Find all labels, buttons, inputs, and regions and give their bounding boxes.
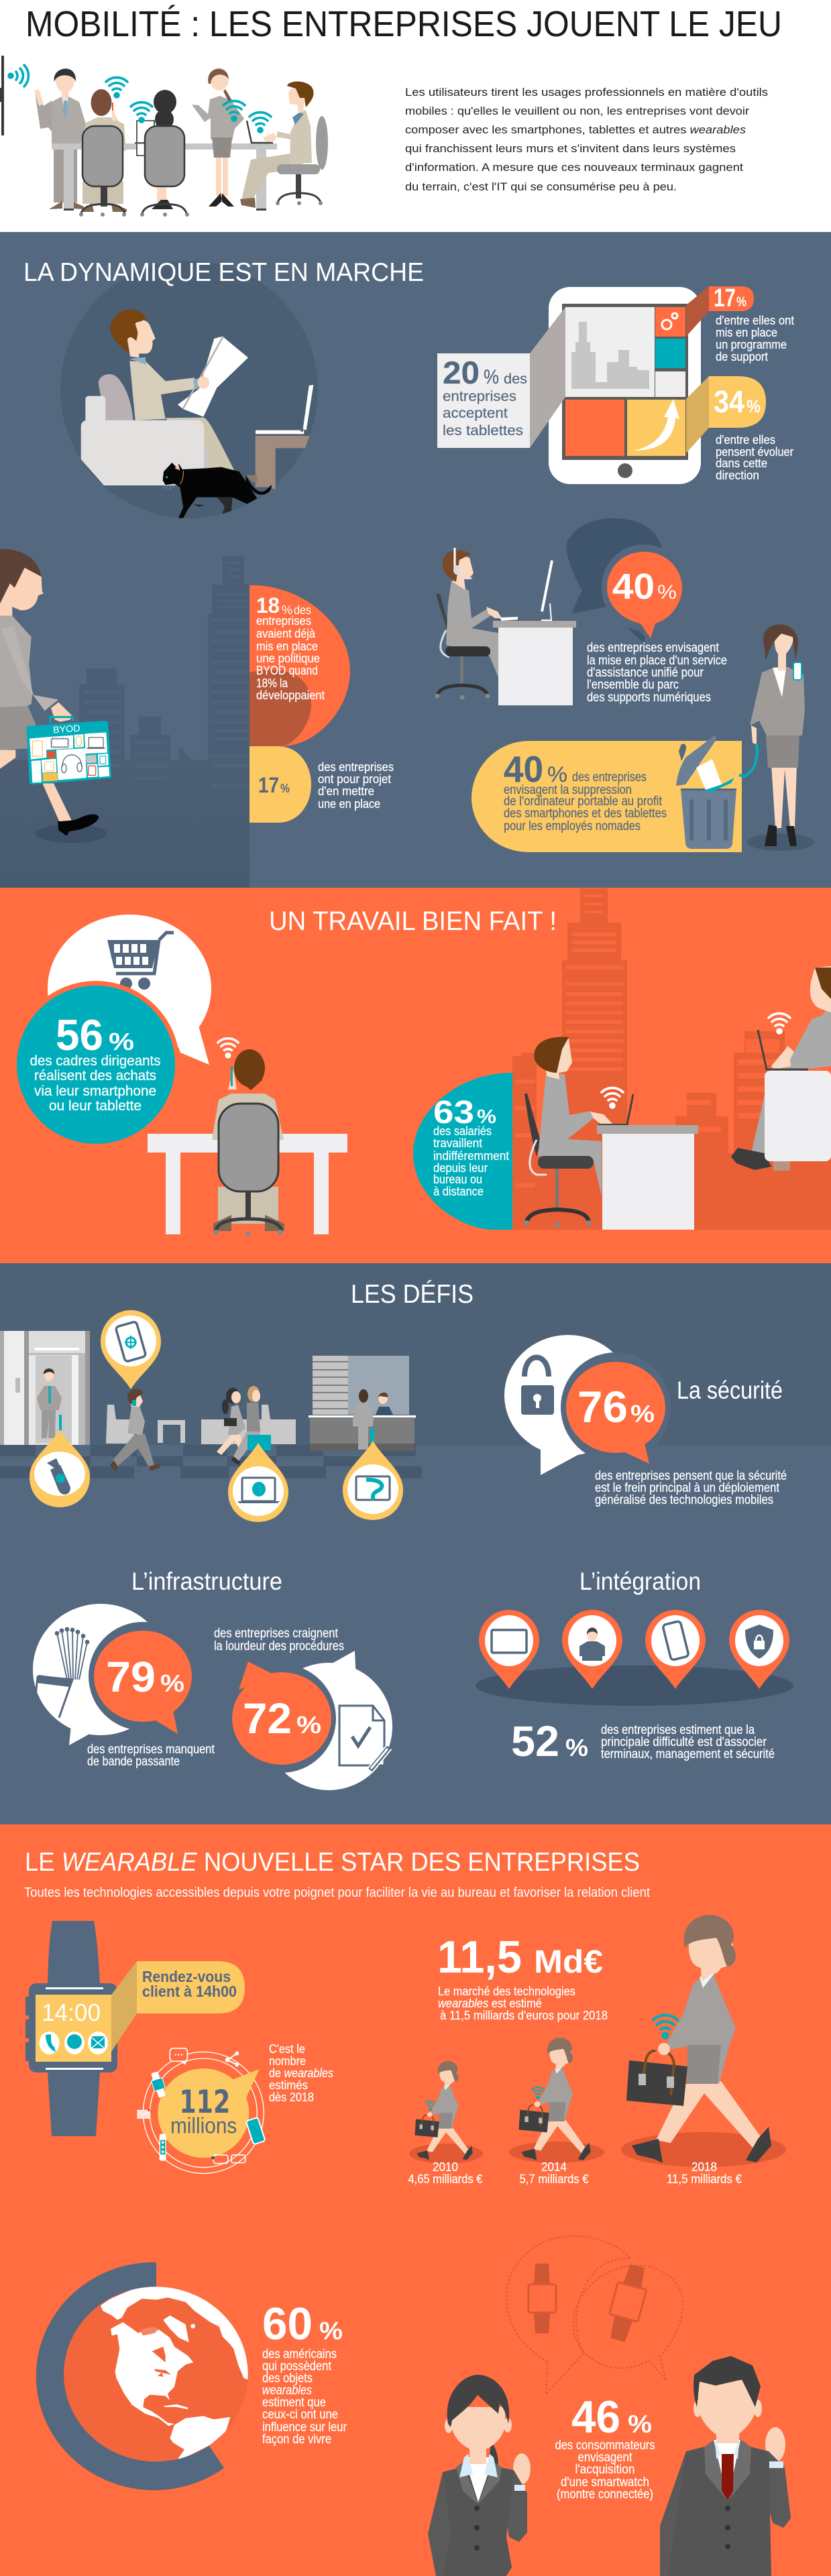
stat: 40% laptop removal with trash: 40	[504, 748, 543, 790]
illustration: man at laptop	[524, 1037, 698, 1230]
callout: 17% support program: d'entre elles ont	[716, 314, 794, 327]
stat: 46% smartwatch: (montre connectée)	[557, 2487, 653, 2502]
stat: 112 millions wearables: estimés	[269, 2079, 308, 2092]
callout: 17% support program: %	[736, 294, 746, 310]
chart: market growth walkers: 5,7 milliards €	[519, 2172, 589, 2186]
pin: infected usb key	[30, 1429, 90, 1507]
pin: laptop bug	[228, 1443, 288, 1522]
heading: LA DYNAMIQUE EST EN MARCHE	[23, 258, 424, 287]
callout: 17% support program	[686, 284, 794, 363]
callout: 34% plan to evolve: pensent évoluer	[716, 445, 793, 459]
pin: smartphone	[645, 1610, 706, 1689]
stat bubble: 40% unified support service: 40	[612, 567, 655, 607]
stat bubble: 40% unified support service: des entreprises envisagent	[587, 641, 720, 655]
stat bubble: 40% unified support service	[587, 544, 727, 705]
illustration: globe	[36, 2262, 252, 2490]
stat circle: 56%: réalisent des achats	[34, 1068, 156, 1084]
callout: 20% accept tablets: %	[484, 366, 499, 388]
stat: 72% procedures: la lourdeur des procédures	[214, 1639, 344, 1653]
chart: market growth walkers: 2014	[541, 2160, 567, 2174]
stat: 76% security: %	[630, 1400, 655, 1427]
stat: 52%: principale difficulté est d'associer	[601, 1735, 767, 1749]
stat: 17% projects: %	[280, 782, 290, 795]
illustration: man reading on a sofa with cat	[60, 261, 318, 518]
stat: 60% americans: estiment que	[262, 2396, 326, 2410]
stat: 79% bandwidth: 79	[106, 1653, 156, 1701]
stat: 63%: travaillent	[433, 1136, 482, 1150]
stat: 17% projects: 17	[258, 773, 279, 797]
stat: 40% laptop removal with trash: de l'ordinateur portable au profit	[504, 795, 663, 809]
stat: 11,5 Md€: à 11,5 milliards d'euros pour 2018	[440, 2009, 608, 2022]
illustration: smartwatch: 14:00	[42, 1999, 101, 2026]
stat circle: 56%: des cadres dirigeants	[30, 1053, 161, 1069]
stat: 60% americans: façon de vivre	[262, 2433, 331, 2447]
stat: 60% americans: wearables	[262, 2384, 312, 2398]
stat: 60% americans: des objets	[262, 2372, 313, 2386]
chart: market growth walkers	[408, 1915, 786, 2186]
callout: 34% plan to evolve: d'entre elles	[716, 433, 775, 447]
stat circle: 56%: 56	[56, 1010, 103, 1059]
stat bubble: 40% unified support service: l'ensemble du parc	[587, 678, 679, 692]
stat: 112 millions wearables: dès 2018	[269, 2091, 314, 2104]
stat: 79% bandwidth	[33, 1604, 215, 1769]
stat: 60% americans: influence sur leur	[262, 2420, 347, 2435]
illustration: dotted watch bubbles	[506, 2236, 683, 2394]
stat: 40% laptop removal with trash: pour les employés nomades	[504, 819, 641, 833]
stat: 46% smartwatch: %	[628, 2410, 652, 2438]
intro text block	[405, 86, 768, 193]
stat: 60% americans: %	[319, 2317, 343, 2345]
stat: 76% security: généralisé des technologies mobiles	[595, 1493, 773, 1507]
illustration: support agent at desk	[435, 518, 663, 705]
chart: market growth walkers: 2018	[691, 2160, 717, 2174]
stat circle: 56%: %	[109, 1028, 134, 1055]
chart: market growth walkers: 4,65 milliards €	[408, 2172, 483, 2186]
stat: 46% smartwatch: 46	[571, 2392, 620, 2443]
callout: 20% accept tablets: les tablettes	[443, 423, 523, 438]
stat: 76% security: 76	[577, 1382, 628, 1431]
stat: 18% BYOD policy: avaient déjà	[256, 627, 316, 640]
stat: 112 millions wearables	[137, 2042, 333, 2174]
stat: 63%: des salariés	[433, 1124, 492, 1138]
panel: un travail bien fait	[12, 888, 831, 1236]
stat: 40% laptop removal with trash: envisagent la suppression	[504, 783, 632, 797]
stat: 60% americans: ceux-ci ont une	[262, 2408, 338, 2422]
bubble: cart	[48, 915, 211, 1065]
stat: 52%: terminaux, management et sécurité	[601, 1747, 775, 1761]
stat: 79% bandwidth: %	[160, 1670, 184, 1697]
stat: 11,5 Md€	[437, 1932, 608, 2022]
panel: la dynamique est en marche	[0, 258, 814, 888]
stat: 112 millions wearables: de wearables	[269, 2066, 333, 2080]
stat: 18% BYOD policy: BYOD quand	[256, 664, 318, 677]
illustration: tablet with stats	[437, 284, 794, 484]
stat: 46% smartwatch: envisagent	[578, 2451, 632, 2465]
stat: 18% BYOD policy: une politique	[256, 652, 320, 665]
intro text block: du terrain, c'est l'IT qui se consumérise peu à peu.	[405, 180, 677, 193]
subheading: Toutes les technologies accessibles depuis votre poignet pour faciliter la vie au bureau et favoriser la relation client	[24, 1885, 650, 1900]
illustration: smartwatch	[25, 1921, 245, 2136]
stat: 63%: 63	[433, 1095, 474, 1130]
stat: 60% americans: des américains	[262, 2347, 337, 2361]
illustration: man from behind at desk	[148, 1049, 347, 1236]
callout: appointment	[111, 1961, 245, 2052]
callout: 17% support program: mis en place	[716, 326, 777, 339]
stat: 11,5 Md€: Md€	[534, 1944, 603, 1980]
stat: 63%	[413, 1073, 512, 1230]
stat: 17% projects: ont pour projet	[318, 772, 391, 786]
stat: 52%: %	[565, 1734, 588, 1761]
callout: 34% plan to evolve: %	[746, 396, 761, 416]
stat: 60% americans	[262, 2298, 347, 2447]
background skyline	[512, 888, 831, 1230]
illustration: meeting scene	[0, 56, 328, 217]
callout: 20% accept tablets: 20	[443, 355, 480, 390]
panel: le wearable	[24, 1848, 791, 2576]
stat: 18% BYOD policy: mis en place	[256, 640, 318, 653]
stat: 79% bandwidth: des entreprises manquent	[87, 1743, 215, 1757]
pin: shield	[729, 1610, 789, 1689]
stat: 52%: des entreprises estiment que la	[601, 1723, 755, 1737]
stat circle: 56%	[12, 981, 180, 1149]
callout: 20% accept tablets	[437, 307, 565, 448]
stat: 17% projects: des entreprises	[318, 760, 394, 774]
illustration: woman with phone	[747, 624, 814, 851]
stat: 17% projects	[250, 746, 394, 823]
stat: 18% BYOD policy: 18	[256, 593, 280, 618]
stat: 112 millions wearables: 112	[179, 2084, 230, 2121]
stat: 112 millions wearables: C'est le	[269, 2042, 305, 2056]
illustration: businessman	[660, 2356, 791, 2576]
stat: 52%	[511, 1717, 775, 1765]
stat: 40% laptop removal with trash: des entreprises	[572, 770, 647, 784]
stat: 11,5 Md€: Le marché des technologies	[438, 1985, 575, 1998]
illustration: BYOD woman and skyline	[0, 549, 250, 888]
stat: 18% BYOD policy: entreprises	[256, 614, 311, 628]
stat: 40% laptop removal with trash: des smartphones et des tablettes	[504, 807, 667, 821]
callout: 20% accept tablets: acceptent	[443, 406, 508, 421]
pin: person	[562, 1610, 622, 1689]
stat: 18% BYOD policy: des	[294, 603, 311, 617]
callout: 17% support program: de support	[716, 350, 768, 363]
icon: wifi	[218, 1039, 238, 1057]
pin: tablet	[479, 1610, 539, 1689]
stat: 76% security: des entreprises pensent que la sécurité	[595, 1469, 787, 1483]
stat: 17% projects: une en place	[318, 797, 380, 811]
stat: 40% laptop removal with trash	[472, 736, 757, 852]
intro text block: qui franchissent leurs murs et s'invitent dans leurs systèmes	[405, 142, 736, 155]
sub-heading: infrastructure: L’infrastructure	[131, 1568, 282, 1595]
stat: 60% americans: qui possèdent	[262, 2359, 332, 2374]
pin: tablet worm	[343, 1441, 403, 1520]
stat: 40% laptop removal with trash: %	[547, 762, 567, 786]
stat bubble: 40% unified support service: %	[657, 581, 677, 603]
callout: appointment: Rendez-vous	[142, 1968, 231, 1985]
callout: 34% plan to evolve: direction	[716, 469, 759, 482]
stat: 46% smartwatch: des consommateurs	[555, 2439, 655, 2453]
stat: 63%: bureau ou	[433, 1173, 482, 1186]
stat circle: 56%: ou leur tablette	[49, 1098, 142, 1114]
stat: 63%: depuis leur	[433, 1161, 488, 1175]
pin: infected phone	[101, 1310, 161, 1389]
stat: 76% security	[504, 1335, 787, 1507]
callout: 34% plan to evolve	[686, 376, 793, 482]
stat: 46% smartwatch: l'acquisition	[575, 2463, 634, 2477]
heading: LES DÉFIS	[351, 1280, 474, 1309]
stat circle: 56%: via leur smartphone	[34, 1084, 156, 1099]
stat: 46% smartwatch: d'une smartwatch	[561, 2475, 649, 2490]
stat: 72% procedures: %	[296, 1711, 321, 1739]
stat: 18% BYOD policy	[250, 585, 350, 746]
stat: 60% americans: 60	[262, 2298, 313, 2349]
stat: 72% procedures	[214, 1627, 392, 1790]
stat: 18% BYOD policy: 18% la	[256, 677, 288, 690]
chart: market growth walkers: 11,5 milliards €	[667, 2172, 742, 2186]
stat: 72% procedures: des entreprises craignent	[214, 1627, 339, 1641]
callout: 20% accept tablets: des	[504, 371, 527, 387]
stat: 112 millions wearables: nombre	[269, 2054, 306, 2068]
stat: 63%: indifféremment	[433, 1149, 509, 1163]
callout: 20% accept tablets: entreprises	[443, 389, 516, 404]
illustration: second worker at desk	[731, 966, 831, 1171]
illustration: BYOD woman and skyline: BYOD	[52, 723, 80, 735]
stat: 18% BYOD policy: %	[282, 603, 292, 617]
callout: 17% support program: 17	[714, 284, 736, 312]
panel: les défis	[0, 1280, 793, 1790]
stat: 18% BYOD policy: développaient	[256, 689, 325, 702]
stat: 11,5 Md€: wearables est estimé	[438, 1997, 542, 2010]
stat: 112 millions wearables: millions	[170, 2114, 237, 2139]
stat: 76% security: est le frein principal à un déploiement	[595, 1481, 780, 1495]
callout: 34% plan to evolve: 34	[714, 384, 744, 419]
heading: UN TRAVAIL BIEN FAIT !	[269, 906, 557, 936]
callout: appointment: client à 14h00	[142, 1983, 237, 2000]
stat: 52%: 52	[511, 1717, 559, 1765]
stat: 63%: à distance	[433, 1185, 484, 1198]
pins: integration	[476, 1610, 793, 1706]
illustration: lobby scene	[0, 1331, 422, 1478]
intro text block: composer avec les smartphones, tablettes et autres wearables	[405, 123, 746, 136]
callout: 34% plan to evolve: dans cette	[716, 457, 767, 470]
stat: 76% security: La sécurité	[677, 1377, 783, 1404]
title: MOBILITÉ : LES ENTREPRISES JOUENT LE JEU	[25, 4, 782, 44]
stat: 11,5 Md€: 11,5	[437, 1932, 522, 1983]
heading: LE WEARABLE NOUVELLE STAR DES ENTREPRISES	[25, 1848, 640, 1877]
stat bubble: 40% unified support service: des supports numériques	[587, 691, 711, 705]
stat bubble: 40% unified support service: la mise en place d'un service	[587, 654, 727, 668]
stat: 46% smartwatch	[555, 2392, 655, 2502]
stat: 79% bandwidth: de bande passante	[87, 1755, 180, 1769]
chart: market growth walkers: 2010	[433, 2160, 458, 2174]
illustration: businesswoman	[428, 2375, 531, 2576]
stat: 17% projects: d'en mettre	[318, 784, 374, 798]
sub-heading: integration: L’intégration	[579, 1568, 701, 1595]
intro text block: Les utilisateurs tirent les usages professionnels en matière d'outils	[405, 86, 768, 99]
stat bubble: 40% unified support service: d'assistance unifié pour	[587, 666, 704, 680]
intro text block: mobiles : qu'elles le veuillent ou non, les entreprises vont devoir	[405, 105, 749, 117]
callout: 17% support program: un programme	[716, 338, 787, 351]
stat: 72% procedures: 72	[243, 1694, 292, 1743]
intro text block: d'information. A mesure que ces nouveaux terminaux gagnent	[405, 161, 743, 174]
stat: 63%: %	[477, 1106, 496, 1128]
